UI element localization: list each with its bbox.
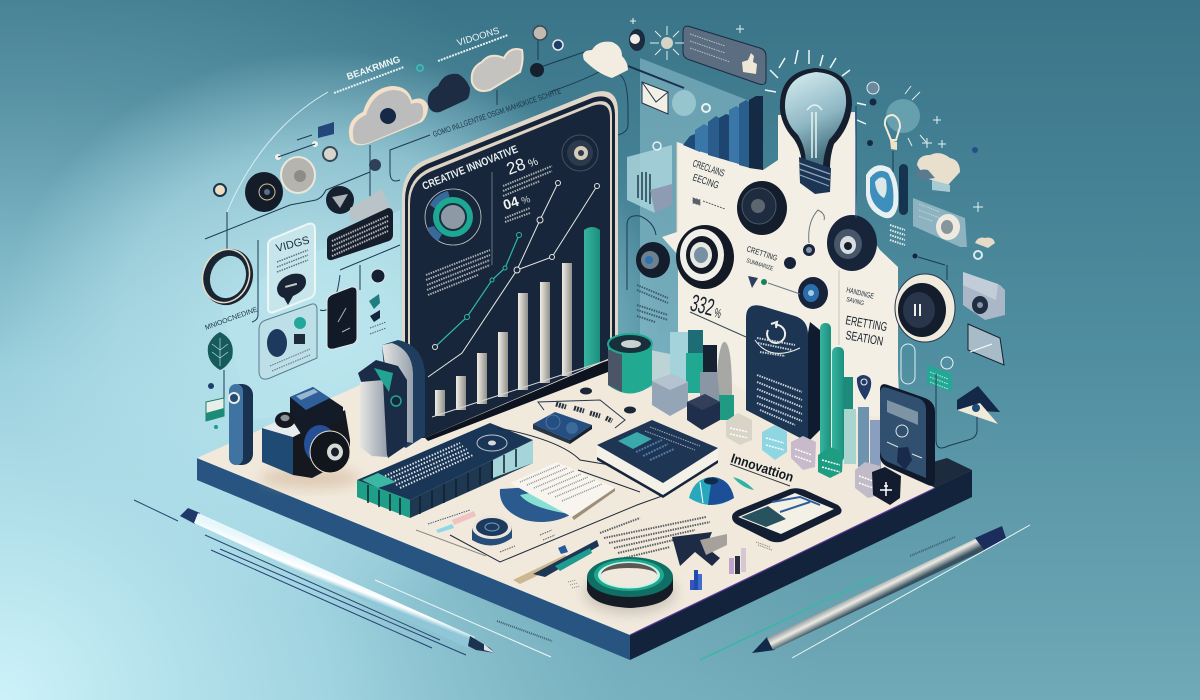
icon: leaf [208,332,233,398]
hatch mark [568,580,580,588]
panel: screen stack [402,91,618,441]
stat: 332%: 332% [687,290,726,324]
icon: phone right [880,384,935,486]
sparkles [630,18,983,212]
heading: CRETTING: CRETTING [745,244,779,263]
speech note [350,189,392,222]
cylinder teal [608,334,652,394]
icon: pin [629,29,645,51]
icon: envelope [628,66,710,150]
icon: dome [689,477,734,505]
cloud: navy [428,74,470,112]
icon: grey disc [281,157,315,193]
icon: envelope right [968,324,1004,365]
icon: lightbulb [765,50,866,194]
connector lines right [936,374,977,448]
round dial icon on screen [562,135,598,171]
hatched guide line [497,621,552,641]
platform left side [197,458,630,660]
icon: stacked devices [358,340,425,458]
icon: blue pill [229,384,253,465]
panel: keyboard block [357,423,533,518]
small device on platform [533,412,592,444]
stacked blocks [670,330,734,420]
heading: VIDOONS: VIDOONS [456,26,501,49]
heading: HANDINGE SAVING: HANDINGE [846,285,875,301]
line chart on screen [428,180,600,377]
heading: CRECLAINS EECING: EECING [691,172,720,192]
icon: white ring target [676,225,734,289]
card with thumbs up [683,26,766,85]
guide lines under left pen [211,549,466,655]
3d bars right of panel [820,323,881,470]
small cylinder [472,515,512,546]
label: MNIOOCNEDINE: MNIOOCNEDINE [204,306,259,332]
left pen [180,508,495,653]
small legend tags [416,510,555,556]
microtext below device panel [637,285,668,322]
panel: VIDGS card [268,224,315,312]
icon: right disc [827,215,877,271]
cloud: white [583,42,628,78]
panel: app card [259,304,317,379]
hatched line right [910,537,955,556]
dark text card [327,208,393,260]
icon: play button [326,186,354,214]
bar chart on screen [432,227,608,417]
cloud: large grey [349,86,428,145]
line beside left pen [375,580,551,657]
icon: sun [650,26,684,60]
icon: dark disc [245,172,283,212]
platform dark back corner [905,458,972,488]
heading: HANDINGE SAVING: SAVING [846,296,865,307]
chart semi-circle with teal [500,487,572,522]
icon strip on platform [538,388,636,428]
teal tag card [927,357,953,392]
label: Innovation: Innovattion [729,451,796,485]
small feather mark [733,477,754,490]
bar chart on poster [683,96,763,170]
icon: fingerprint shape [866,165,898,218]
heading: BEAKRMNG: BEAKRMNG [345,54,402,83]
icon: button with rim [895,274,955,342]
top guide line [134,500,440,640]
small icons beside phone [369,269,386,334]
open book pages [510,462,615,520]
tiny text tag [890,225,905,245]
icon: phone [327,287,357,349]
icon: left lens [636,242,670,278]
underline for label [730,464,790,486]
outlined slot [901,344,915,384]
icon: eye triangle [957,386,1000,424]
icon: navy pill right [899,164,908,215]
small text cubes [726,413,880,498]
tape ring [584,557,676,614]
platform top surface [197,340,935,635]
navy text panel [746,305,820,442]
icon: camera [260,387,360,489]
outlined device panel [627,216,656,290]
right pen [752,526,1006,653]
icon: pin location [857,375,871,400]
icon: folder with lens [963,272,1005,320]
pale backing panel behind left icons [220,210,400,420]
heading: HANDINGE SAVING [846,285,875,307]
icon: small bulb [867,82,978,172]
target ring icon on screen [425,189,481,245]
long caption above screen: GOMO INLLGENTIIE OSGM MAHIDKICE SCHHTE [432,86,562,139]
heading: ERETTING SEATION: ERETTING [844,313,888,334]
icon: tablet on platform [732,488,842,550]
screen title: CREATIVE INNOVATIVE [421,143,520,193]
heading: CRETTING [745,244,779,273]
lines beside right pen [792,525,1030,658]
connector lines left [205,25,628,322]
teal guide line right [700,577,875,660]
microtext under small headings [334,35,508,93]
heading: CRETTING: SUMMARIZE [745,258,774,273]
platform right side [630,470,972,660]
small cloud with ring [912,238,995,280]
icon group: glass shield panel [627,145,672,213]
small bars blue [690,570,702,590]
small icons: nodes at top [214,26,563,196]
small nodes on poster [748,210,828,309]
icon: pen on platform [513,540,599,584]
screen stat: 28%: 28 % [504,150,540,179]
line from bulb [855,106,857,218]
arc connector at upper left [227,92,328,212]
small label row [693,198,725,209]
navy cube [687,394,720,430]
platform base [197,340,972,660]
text block on platform [600,517,710,558]
icon: book [597,420,718,498]
cloud: pale grey [472,49,523,91]
heading: ERETTING SEATION: SEATION [844,328,884,349]
small bars lilac [729,548,746,574]
heading: CRECLAINS EECING: CRECLAINS [691,158,726,180]
panel: cream poster [662,96,900,420]
panel: VIDGS card: VIDGS [275,234,311,255]
icon: disc top centre [737,181,787,235]
layout connector lines on platform [450,428,665,562]
card with ring icon [913,198,967,247]
icon: arrow shape [672,532,727,566]
grey cube [652,374,688,416]
heading: CRECLAINS EECING [691,158,726,192]
heading: ERETTING SEATION [844,313,888,349]
screen stat: 04%: 04 % [501,189,532,213]
icon: ring [195,243,257,309]
icon: flag chart [206,383,224,429]
panel: pale glass backdrop at right [640,58,760,390]
screen microtext [426,166,552,295]
icon: cloud right [915,153,960,192]
icon: plus cube [872,467,901,505]
